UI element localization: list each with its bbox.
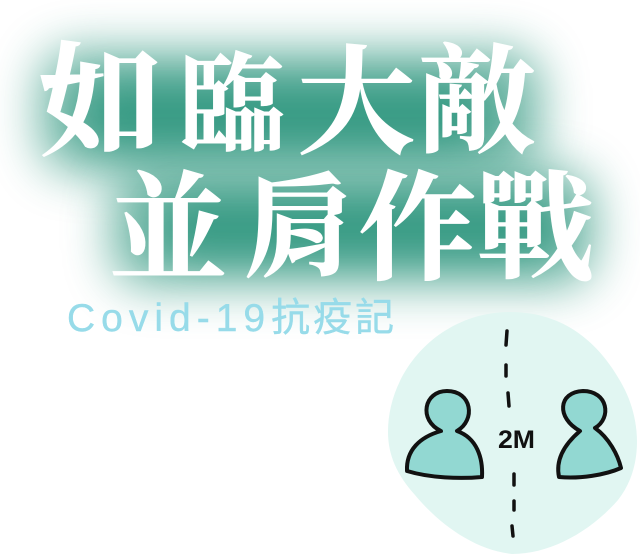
person left [407, 391, 482, 478]
title: 戰 [476, 165, 594, 296]
background circle [388, 312, 637, 554]
label: 2M: 2M [498, 426, 535, 454]
dashed divider [506, 331, 514, 536]
title: 臨 [179, 48, 285, 165]
title [38, 35, 594, 296]
title glow background [4, 14, 630, 322]
title: 大 [297, 39, 416, 170]
title: 肩 [244, 168, 356, 292]
title: 並 [109, 165, 228, 296]
person right [558, 391, 621, 478]
title: 作 [358, 165, 476, 296]
illustration: two people two metres apart [388, 312, 637, 554]
subtitle: Covid-19抗疫記 [67, 297, 397, 340]
title: 敵 [418, 38, 536, 169]
title: 如 [38, 35, 162, 172]
